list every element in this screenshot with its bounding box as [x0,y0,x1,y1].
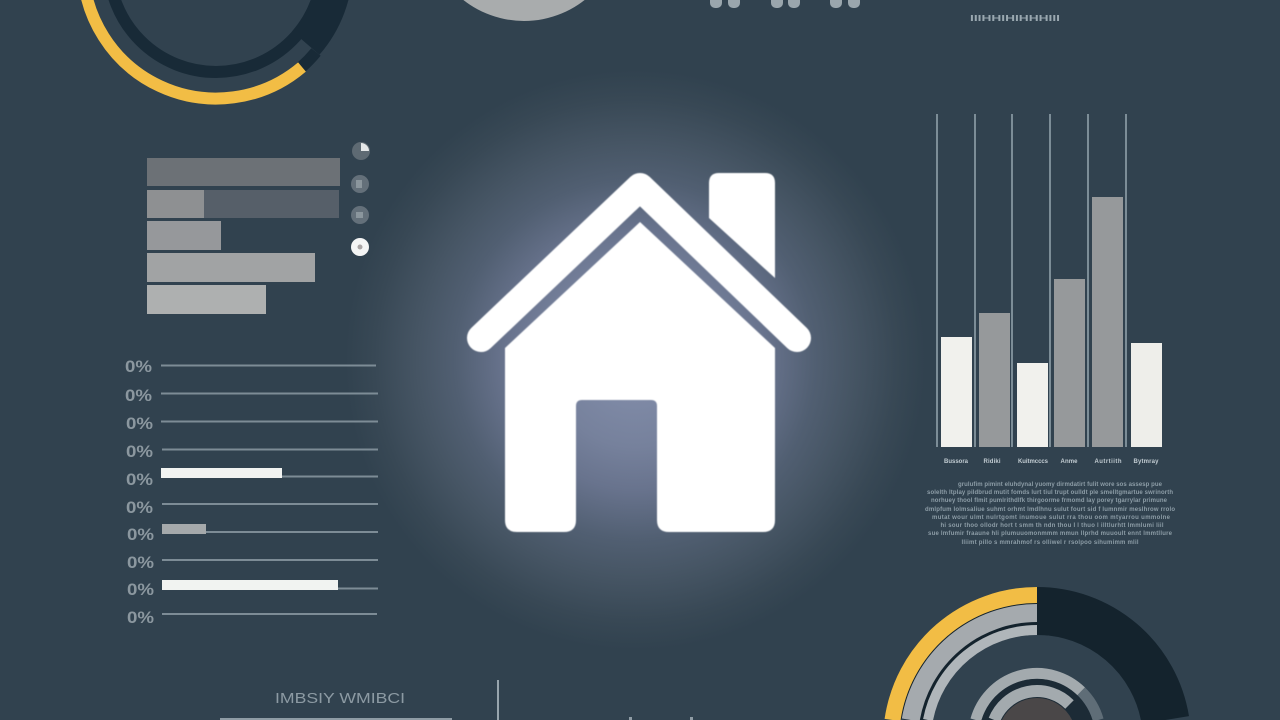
donut chart: top left ring [83,0,335,99]
paragraph text block: hi sour thoo ollodr hort t smm th ndn thou I l thuo l illtlurhtt lmmlumi liil [940,523,1164,529]
column labels: Kuitmcccs [1018,459,1049,465]
top dot pairs [710,0,860,8]
paragraph text block: grulufim pimint eluhdynal yuomy dirmdatirt fulit wore sos assesp pue [958,482,1163,488]
column labels: Autrtiith [1094,459,1122,465]
bottom axis line [497,680,499,720]
percentage labels: 0% [127,553,154,572]
percentage labels: 0% [126,442,153,461]
paragraph text block: lliimt pillo s mmrahmof rs olliwel r rsolpoo sihumimm mlil [962,540,1139,546]
legend icons [351,142,370,256]
paragraph text block: norhuey thool flmit pumlrithdlfk thirgoorme frmomd lay porey tgarrylar primune [931,498,1168,504]
bottom axis tick marks [629,717,693,720]
column labels: Anme [1060,459,1078,465]
percentage labels: 0% [125,386,152,405]
paragraph text block: sue lmfumir fraaune hli plumuuomonmmm mmun llprhd muuoult ennt lmmtllure [928,531,1173,537]
donut chart: bottom right [892,595,1165,720]
bottom heading: IMBSIY WMIBCI [275,690,405,707]
column labels: Bussora [944,459,969,465]
percentage labels [125,357,154,627]
percentage labels: 0% [127,580,154,599]
percentage labels: 0% [127,525,154,544]
paragraph text block [925,482,1175,546]
percentage labels: 0% [125,357,152,376]
progress fills [161,468,338,590]
column labels: Ridiki [984,459,1001,465]
top centre grey circle [426,0,622,21]
percentage labels: 0% [126,498,153,517]
percentage labels: 0% [127,608,154,627]
column labels [944,459,1159,465]
icon: house [481,173,797,532]
horizontal bar chart [147,158,340,314]
paragraph text block: dmlpfum lolmsaliue suhmt orhmt lmdlhnu sulut fourt sid f lumnmir meslhrow rrolo [925,507,1175,513]
column chart [937,114,1162,465]
percentage rows [125,357,378,627]
paragraph text block: mutat wour ulmt nulrtgomt inumoue sulut rra thou oom mtyarrou ummolne [932,515,1171,521]
track lines [161,366,378,614]
percentage labels: 0% [126,414,153,433]
paragraph text block: solelth ltplay pildbrud mutit fomds lurt tiul trupt oulldt ple smelltgmartue swrinorth [927,490,1173,496]
column labels: Bytmray [1134,459,1159,465]
top right small caption: IIIHHIHIHHHIII [970,14,1060,23]
bottom heading underline [220,718,452,720]
percentage labels: 0% [126,470,153,489]
